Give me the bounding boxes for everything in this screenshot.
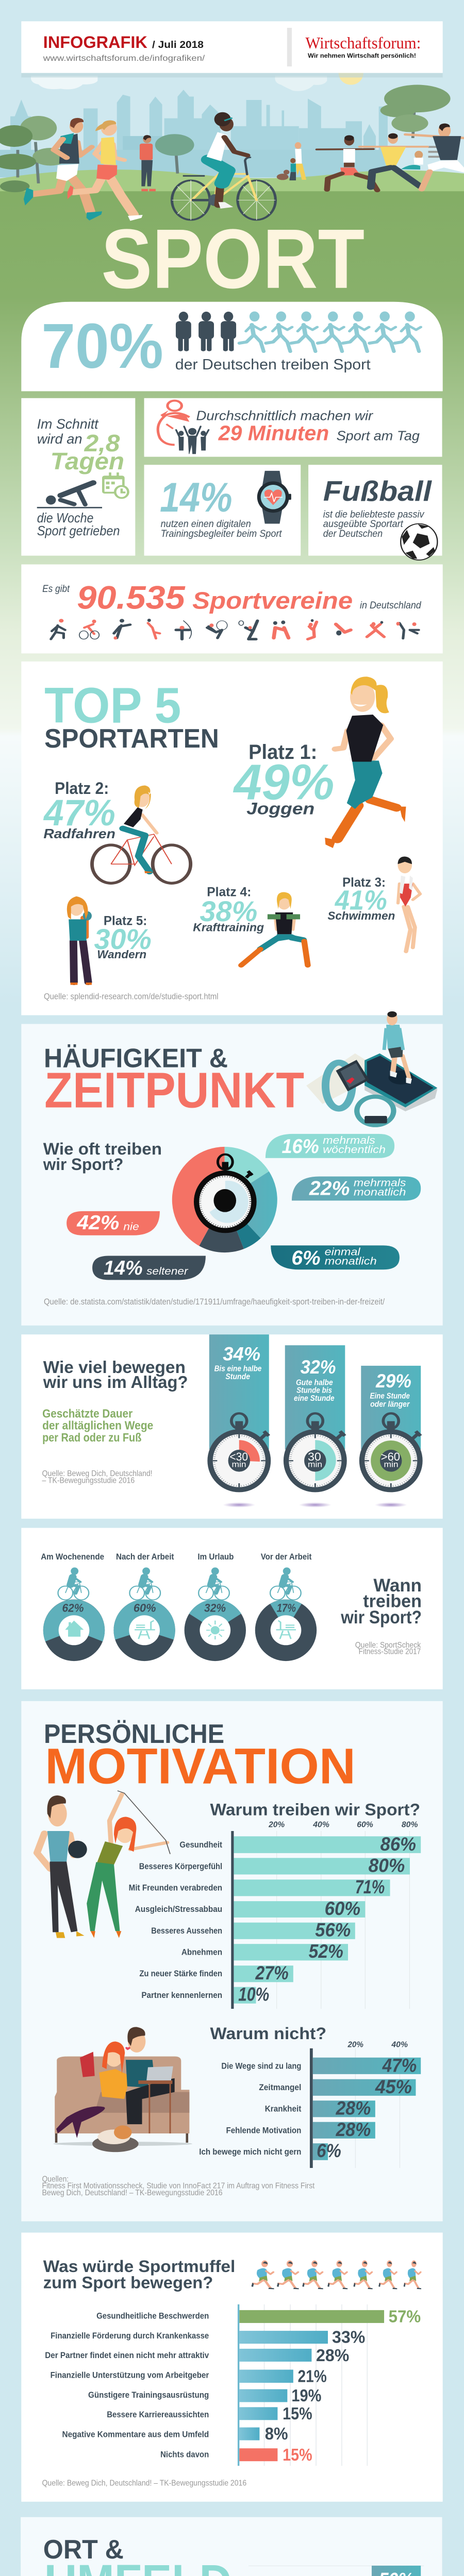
illustration: fitness tracker and phone bbox=[306, 1011, 437, 1125]
bar chart: Sportmuffel: Finanzielle Förderung durch Krankenkasse bbox=[51, 2331, 209, 2341]
number: 2,8 Tagen: 2,8 bbox=[84, 430, 120, 456]
number: 29 Minuten: 29 Minuten bbox=[218, 421, 329, 445]
column: gute halbe Stunde bbox=[284, 1345, 347, 1507]
heading: SPORTARTEN: SPORTARTEN bbox=[44, 723, 219, 753]
text: Im Schnitt: wird an bbox=[37, 431, 82, 447]
bar chart: Warum treiben wir Sport: Besseres Körpergefühl bbox=[139, 1861, 222, 1871]
text: Im Schnitt: die Woche bbox=[37, 511, 93, 526]
heading: Wie oft treiben wir Sport: wir Sport? bbox=[43, 1155, 123, 1174]
text: in Deutschland: in Deutschland bbox=[360, 600, 422, 611]
callout: 16 percent: wöchentlich bbox=[323, 1144, 386, 1156]
bar chart: Warum nicht: Die Wege sind zu lang bbox=[221, 2061, 301, 2071]
bar chart: Sportmuffel: Gesundheitliche Beschwerden bbox=[96, 2311, 209, 2321]
text: geschätzte Dauer: der alltäglichen Wege bbox=[42, 1419, 153, 1432]
figure: couple exercising bbox=[37, 1791, 170, 1938]
callout: 42 percent bbox=[67, 1211, 160, 1235]
bar chart: Sportmuffel: Der Partner findet einen nicht mehr attraktiv bbox=[45, 2350, 209, 2361]
icon row: shrinking joggers bbox=[251, 2260, 421, 2289]
stat: Platz 5 Wandern bbox=[94, 914, 152, 961]
stat: Platz 5 Wandern: Wandern bbox=[97, 948, 146, 961]
chart: Am Wochenende 62%: Am Wochenende bbox=[41, 1552, 104, 1562]
text: geschätzte Dauer: per Rad oder zu Fuß bbox=[42, 1431, 141, 1444]
column: eine Stunde oder länger bbox=[359, 1366, 423, 1507]
bar chart: Warum nicht: 40% bbox=[391, 2040, 408, 2049]
figure: hiker bbox=[67, 896, 92, 985]
column: eine Stunde oder länger: oder länger bbox=[370, 1399, 410, 1409]
bar chart: Warum treiben wir Sport: 80% bbox=[369, 1855, 405, 1876]
source: Fitness First Motivationsscheck, Studie von InnoFact 217 im Auftrag von Fitness First bbox=[42, 2181, 314, 2190]
panel: 29 Minuten bbox=[144, 398, 442, 457]
icon: smartwatch bbox=[257, 471, 291, 523]
bar chart: Warum nicht: 20% bbox=[347, 2040, 363, 2049]
ground bbox=[0, 191, 464, 199]
bar chart: Warum nicht: Krankheit bbox=[265, 2104, 302, 2114]
heading: Persönliche: PERSÖNLICHE bbox=[44, 1719, 224, 1749]
icon row: sports bbox=[51, 619, 419, 639]
stat: Platz 2 Radfahren: Radfahren bbox=[43, 826, 115, 841]
stat: Platz 1 Joggen: Platz 1: bbox=[248, 740, 317, 764]
bar chart: Warum treiben wir Sport: 20% bbox=[268, 1820, 285, 1829]
column: bis eine halbe Stunde: Stunde bbox=[225, 1371, 250, 1381]
figure: jogger bbox=[325, 676, 406, 848]
hero illustration: park scene bbox=[0, 21, 464, 306]
stat: Platz 2 Radfahren bbox=[43, 779, 115, 841]
number: 2,8 Tagen bbox=[51, 430, 124, 475]
bar chart: Warum treiben wir Sport: Abnehmen bbox=[181, 1947, 222, 1957]
bar chart: Sportmuffel: 57% bbox=[389, 2308, 421, 2326]
source: Fitness-Studie 2017 bbox=[359, 1647, 421, 1656]
panel: 14 percent bbox=[144, 465, 301, 556]
bar chart: Warum nicht: Fehlende Motivation bbox=[226, 2126, 301, 2136]
source: Beweg Dich, Deutschland! – TK-Bewegungsstudie 2016 bbox=[42, 2188, 223, 2197]
bar chart: Warum nicht: 28% bbox=[336, 2119, 371, 2141]
panel: key facts bbox=[21, 302, 443, 653]
heading: Zeitpunkt: ZEITPUNKT bbox=[44, 1062, 304, 1118]
text: Im Schnitt bbox=[37, 416, 120, 538]
panel: persönliche Motivation bbox=[21, 1701, 443, 2222]
heading: Warum treiben wir Sport: Warum treiben wir Sport? bbox=[210, 1800, 420, 1819]
bar chart: Warum treiben wir Sport: 52% bbox=[309, 1941, 343, 1962]
column: eine Stunde oder länger: min bbox=[384, 1460, 399, 1469]
trees bbox=[0, 85, 451, 192]
bar chart: Sportmuffel: 19% bbox=[291, 2386, 321, 2405]
source: – TK-Bewegungsstudie 2016 bbox=[42, 1476, 135, 1485]
column: eine Stunde oder länger: 29% bbox=[375, 1370, 411, 1392]
source: Quelle: Beweg Dich, Deutschland! – TK-Bewegungsstudie 2016 bbox=[42, 2478, 246, 2487]
panel: Sportmuffel bbox=[21, 2232, 443, 2502]
stat: Platz 3 Schwimmen bbox=[327, 875, 395, 922]
figure: swimmer bbox=[397, 856, 420, 952]
chart: Im Urlaub 32%: 32% bbox=[204, 1602, 226, 1615]
text: passiv ausgeübt: ausgeübte Sportart bbox=[323, 518, 404, 530]
callout: 16 percent: mehrmals bbox=[323, 1135, 375, 1146]
bar chart: Warum nicht: 47% bbox=[382, 2055, 417, 2076]
bar chart: Warum treiben wir Sport: 56% bbox=[315, 1919, 351, 1941]
heading: Wie viel bewegen wir uns: Wie viel bewegen bbox=[43, 1359, 186, 1377]
figure: weight training bbox=[241, 892, 308, 965]
heading: Warum nicht: Warum nicht? bbox=[210, 2024, 326, 2043]
text: der Deutschen: der Deutschen treiben Sport bbox=[175, 356, 371, 372]
bar chart: Warum treiben wir Sport: 60% bbox=[325, 1898, 360, 1920]
bar chart: Warum nicht: 45% bbox=[375, 2076, 412, 2098]
stat: Platz 3 Schwimmen: Schwimmen bbox=[327, 910, 395, 922]
text: Es gibt: Es gibt bbox=[42, 583, 70, 594]
stat: Platz 3 Schwimmen: Platz 3: bbox=[342, 875, 386, 890]
panel: Häufigkeit und Zeitpunkt bbox=[21, 1011, 443, 1326]
chart: Nach der Arbeit 60%: Nach der Arbeit bbox=[116, 1552, 174, 1562]
bar chart: Sportmuffel: 8% bbox=[265, 2425, 288, 2444]
icon: exercise and calendar bbox=[37, 472, 128, 509]
icon: football bbox=[401, 523, 437, 560]
source bbox=[42, 2174, 314, 2197]
panel: Ort und Umfeld bbox=[21, 2517, 442, 2576]
text: geschätzte Dauer: Geschätzte Dauer bbox=[42, 1406, 132, 1420]
panel: 70 percent bbox=[21, 302, 443, 391]
bar chart: Sportmuffel: Nichts davon bbox=[160, 2450, 209, 2460]
heading: Wie oft treiben wir Sport: Wie oft treiben bbox=[43, 1140, 162, 1158]
stat: Platz 4 Krafttraining bbox=[193, 885, 264, 934]
figure: cyclist bbox=[172, 112, 275, 220]
heading: Ort und: ORT & bbox=[43, 2534, 124, 2564]
panel: Top 5 Sportarten bbox=[21, 662, 443, 1015]
source bbox=[355, 1640, 421, 1656]
header panel bbox=[21, 21, 443, 77]
text: digitaler Trainingsbegleiter: nutzen einen digitalen bbox=[161, 518, 251, 530]
column: gute halbe Stunde: Stunde bis bbox=[296, 1385, 332, 1395]
column: bis eine halbe Stunde: min bbox=[231, 1460, 246, 1469]
bar chart: Warum treiben wir Sport: 27% bbox=[255, 1962, 289, 1984]
stat: Platz 5 Wandern: 30% bbox=[94, 923, 152, 955]
text: geschätzte Dauer bbox=[42, 1406, 153, 1444]
heading: infografik date: INFOGRAFIK bbox=[43, 33, 147, 52]
heading: Wann treiben wir Sport bbox=[340, 1576, 422, 1628]
column: eine Stunde oder länger: Eine Stunde bbox=[370, 1391, 410, 1400]
figure: female runner bbox=[68, 120, 143, 221]
bar chart: Sportmuffel: 28% bbox=[316, 2346, 349, 2365]
column: eine Stunde oder länger: >60 bbox=[381, 1451, 400, 1463]
figure: yoga group bbox=[317, 124, 464, 190]
stat: Platz 4 Krafttraining: Krafttraining bbox=[193, 921, 264, 934]
bar chart: Wo treiben wir Sport bbox=[157, 2566, 424, 2576]
stat: Platz 1 Joggen: 49% bbox=[233, 754, 335, 810]
bar chart: Warum treiben wir Sport bbox=[129, 1820, 421, 2009]
figure: cyclist woman bbox=[92, 786, 191, 883]
bar chart: Warum treiben wir Sport: 10% bbox=[238, 1984, 269, 2005]
callout: 42 percent: nie bbox=[123, 1221, 139, 1233]
stat: Platz 5 Wandern: Platz 5: bbox=[104, 914, 147, 928]
figure: couple on couch bbox=[53, 2027, 192, 2152]
text: url: www.wirtschaftsforum.de/infografiken/ bbox=[43, 54, 205, 63]
bar chart: Warum treiben wir Sport: 86% bbox=[380, 1834, 416, 1855]
stat: Platz 4 Krafttraining: 38% bbox=[200, 895, 257, 927]
bar chart: Warum nicht: Ich bewege mich nicht gern bbox=[199, 2147, 301, 2157]
callout: 16 percent bbox=[266, 1134, 394, 1158]
bar chart: Sportmuffel: 21% bbox=[297, 2367, 327, 2386]
chart: Vor der Arbeit 17%: Vor der Arbeit bbox=[261, 1552, 312, 1562]
callout: 6 percent: monatlich bbox=[325, 1256, 377, 1267]
bar chart: Warum nicht: 28% bbox=[336, 2097, 371, 2119]
column: bis eine halbe Stunde bbox=[207, 1334, 271, 1507]
callout: 22 percent: monatlich bbox=[354, 1187, 406, 1198]
city skyline bbox=[0, 90, 388, 177]
icon: people row bbox=[176, 311, 421, 351]
bar chart: Warum nicht: 6% bbox=[317, 2140, 341, 2162]
figure: person with phone bbox=[140, 135, 156, 191]
bar chart: Warum treiben wir Sport: 60% bbox=[357, 1820, 373, 1829]
text: passiv ausgeübt bbox=[323, 509, 425, 539]
number: 70%: 70% bbox=[41, 311, 163, 382]
chart: Vor der Arbeit 17%: 17% bbox=[277, 1602, 296, 1615]
bar chart: Warum treiben wir Sport: 71% bbox=[355, 1876, 385, 1898]
text: passiv ausgeübt: der Deutschen bbox=[323, 528, 383, 539]
stat: Platz 2 Radfahren: Platz 2: bbox=[55, 779, 109, 798]
heading: Wann treiben wir Sport: wir Sport? bbox=[340, 1607, 422, 1628]
heading: Was würde Sportmuffel bbox=[43, 2257, 235, 2292]
callout: 14 percent: 14% bbox=[104, 1256, 143, 1279]
text: Sport am Tag: Sport am Tag bbox=[337, 429, 420, 444]
source bbox=[42, 1468, 153, 1485]
heading: Fußball: Fußball bbox=[323, 476, 432, 507]
callout: 6 percent: einmal bbox=[325, 1246, 360, 1258]
icon: sun and clouds bbox=[31, 61, 363, 91]
callout: 14 percent bbox=[92, 1256, 206, 1280]
hill bbox=[0, 170, 464, 192]
heading: Wie viel bewegen wir uns: wir uns im Alltag? bbox=[43, 1374, 188, 1392]
stat: Platz 2 Radfahren: 47% bbox=[43, 793, 115, 834]
bar chart: Warum nicht bbox=[199, 2040, 421, 2168]
heading: Wie oft treiben wir Sport bbox=[43, 1140, 162, 1174]
callout: 42 percent: 42% bbox=[76, 1211, 119, 1234]
chart: Am Wochenende 62%: 62% bbox=[62, 1602, 84, 1615]
panel: Sportvereine bbox=[21, 565, 443, 653]
bar chart: Warum treiben wir Sport: Gesundheit bbox=[179, 1840, 222, 1850]
panel: Bewegung im Alltag bbox=[21, 1334, 443, 1519]
column: gute halbe Stunde: 30 bbox=[308, 1451, 321, 1463]
text: Durchschnittlich: Durchschnittlich machen wir bbox=[196, 409, 373, 423]
source: Quelle: splendid-research.com/de/studie-sport.html bbox=[44, 992, 219, 1002]
column: bis eine halbe Stunde: <30 bbox=[229, 1451, 248, 1463]
logo: wirtschaftsforum bbox=[305, 34, 421, 59]
stat: Platz 1 Joggen: Joggen bbox=[246, 799, 314, 818]
icon: stopwatch and group bbox=[158, 401, 209, 454]
figure: male runner bbox=[24, 118, 102, 221]
number: 2,8 Tagen: Tagen bbox=[51, 448, 124, 475]
column: gute halbe Stunde: min bbox=[308, 1460, 322, 1469]
panel: 2,8 Tage bbox=[21, 398, 135, 556]
column: gute halbe Stunde: eine Stunde bbox=[294, 1393, 335, 1403]
bar chart: Sportmuffel: Finanzielle Unterstützung vom Arbeitgeber bbox=[51, 2370, 209, 2380]
text: digitaler Trainingsbegleiter: Trainingsbegleiter beim Sport bbox=[161, 528, 283, 539]
callout: 22 percent: mehrmals bbox=[354, 1177, 406, 1189]
heading: Wann treiben wir Sport: Wann bbox=[373, 1576, 422, 1596]
heading: Häufigkeit: HÄUFIGKEIT & bbox=[44, 1043, 228, 1073]
source: Quelle: SportScheck bbox=[355, 1640, 421, 1650]
column: bis eine halbe Stunde: 34% bbox=[223, 1344, 260, 1364]
text: passiv ausgeübt: ist die beliebteste passiv bbox=[323, 509, 425, 520]
chart: Nach der Arbeit 60%: 60% bbox=[134, 1602, 156, 1615]
callout: 6 percent bbox=[271, 1245, 400, 1269]
chart: Im Urlaub 32%: Im Urlaub bbox=[197, 1552, 234, 1562]
bar chart: Sportmuffel: Negative Kommentare aus dem Umfeld bbox=[62, 2430, 209, 2439]
column: bis eine halbe Stunde: Bis eine halbe bbox=[214, 1364, 261, 1373]
text: Im Schnitt: Im Schnitt bbox=[37, 416, 99, 432]
bar chart: Warum treiben wir Sport: Besseres Aussehen bbox=[151, 1926, 222, 1936]
callout: 14 percent: seltener bbox=[146, 1266, 189, 1277]
bar chart: Warum treiben wir Sport: Zu neuer Stärke finden bbox=[139, 1969, 222, 1978]
bar chart: Warum nicht: Zeitmangel bbox=[259, 2082, 301, 2092]
figure: mother with child and dog bbox=[277, 142, 306, 180]
callout: 22 percent: 22% bbox=[309, 1177, 350, 1199]
bar chart: Warum treiben wir Sport: Ausgleich/Stressabbau bbox=[135, 1904, 222, 1914]
column: gute halbe Stunde: Gute halbe bbox=[296, 1378, 333, 1387]
stat: Platz 4 Krafttraining: Platz 4: bbox=[207, 885, 251, 900]
bar chart: Warum treiben wir Sport: Partner kennenlernen bbox=[141, 1990, 222, 2000]
bar chart: Sportmuffel bbox=[45, 2304, 421, 2466]
bar chart: Warum treiben wir Sport: 80% bbox=[402, 1820, 418, 1829]
bar chart: Sportmuffel: Günstigere Trainingsausrüstung bbox=[88, 2390, 209, 2400]
heading: Wie viel bewegen wir uns bbox=[43, 1359, 188, 1392]
number: 14%: 14% bbox=[160, 474, 233, 520]
bar chart: Warum treiben wir Sport: 40% bbox=[312, 1820, 329, 1829]
source: Quellen: bbox=[42, 2174, 69, 2183]
chart: Am Wochenende 62% bbox=[41, 1552, 105, 1661]
bar chart: Sportmuffel: 15% bbox=[283, 2446, 312, 2465]
bar chart: Sportmuffel: 33% bbox=[332, 2328, 365, 2347]
chart: stopwatch pie bbox=[172, 1147, 277, 1252]
heading: TOP 5: TOP 5 bbox=[44, 677, 181, 734]
logo: wirtschaftsforum: Wir nehmen Wirtschaft persönlich! bbox=[308, 53, 416, 59]
stat: Platz 1 Joggen bbox=[233, 740, 335, 818]
callout: 6 percent: 6% bbox=[291, 1246, 321, 1269]
heading: Motivation: MOTIVATION bbox=[45, 1738, 356, 1794]
column: gute halbe Stunde: 32% bbox=[301, 1357, 336, 1378]
chart: Vor der Arbeit 17% bbox=[255, 1552, 317, 1661]
heading: Wann treiben wir Sport: treiben bbox=[363, 1591, 422, 1611]
callout: 16 percent: 16% bbox=[281, 1134, 319, 1158]
heading: Was würde Sportmuffel: zum Sport bewegen? bbox=[43, 2273, 213, 2292]
callout: 22 percent bbox=[292, 1176, 421, 1200]
chart: Im Urlaub 32% bbox=[185, 1552, 246, 1661]
heading: infografik date: / Juli 2018 bbox=[152, 40, 204, 50]
number: 90.535: 90.535 bbox=[77, 580, 186, 616]
source: Quelle: Beweg Dich, Deutschland! bbox=[42, 1468, 153, 1478]
heading: Was würde Sportmuffel: Was würde Sportmuffel bbox=[43, 2257, 235, 2276]
bar chart: Sportmuffel: 15% bbox=[283, 2404, 312, 2424]
panel: Wann treiben wir Sport bbox=[21, 1528, 443, 1689]
stat: Platz 3 Schwimmen: 41% bbox=[334, 885, 387, 916]
bar chart: Sportmuffel: Bessere Karriereaussichten bbox=[107, 2410, 209, 2419]
chart: Nach der Arbeit 60% bbox=[113, 1552, 175, 1661]
text: Im Schnitt: Sport getrieben bbox=[37, 524, 120, 538]
panel: Fußball bbox=[308, 465, 442, 560]
bar chart: Warum treiben wir Sport: Mit Freunden verabreden bbox=[129, 1883, 222, 1893]
text: digitaler Trainingsbegleiter bbox=[161, 518, 283, 539]
text: Sportvereine: Sportvereine bbox=[192, 588, 353, 614]
